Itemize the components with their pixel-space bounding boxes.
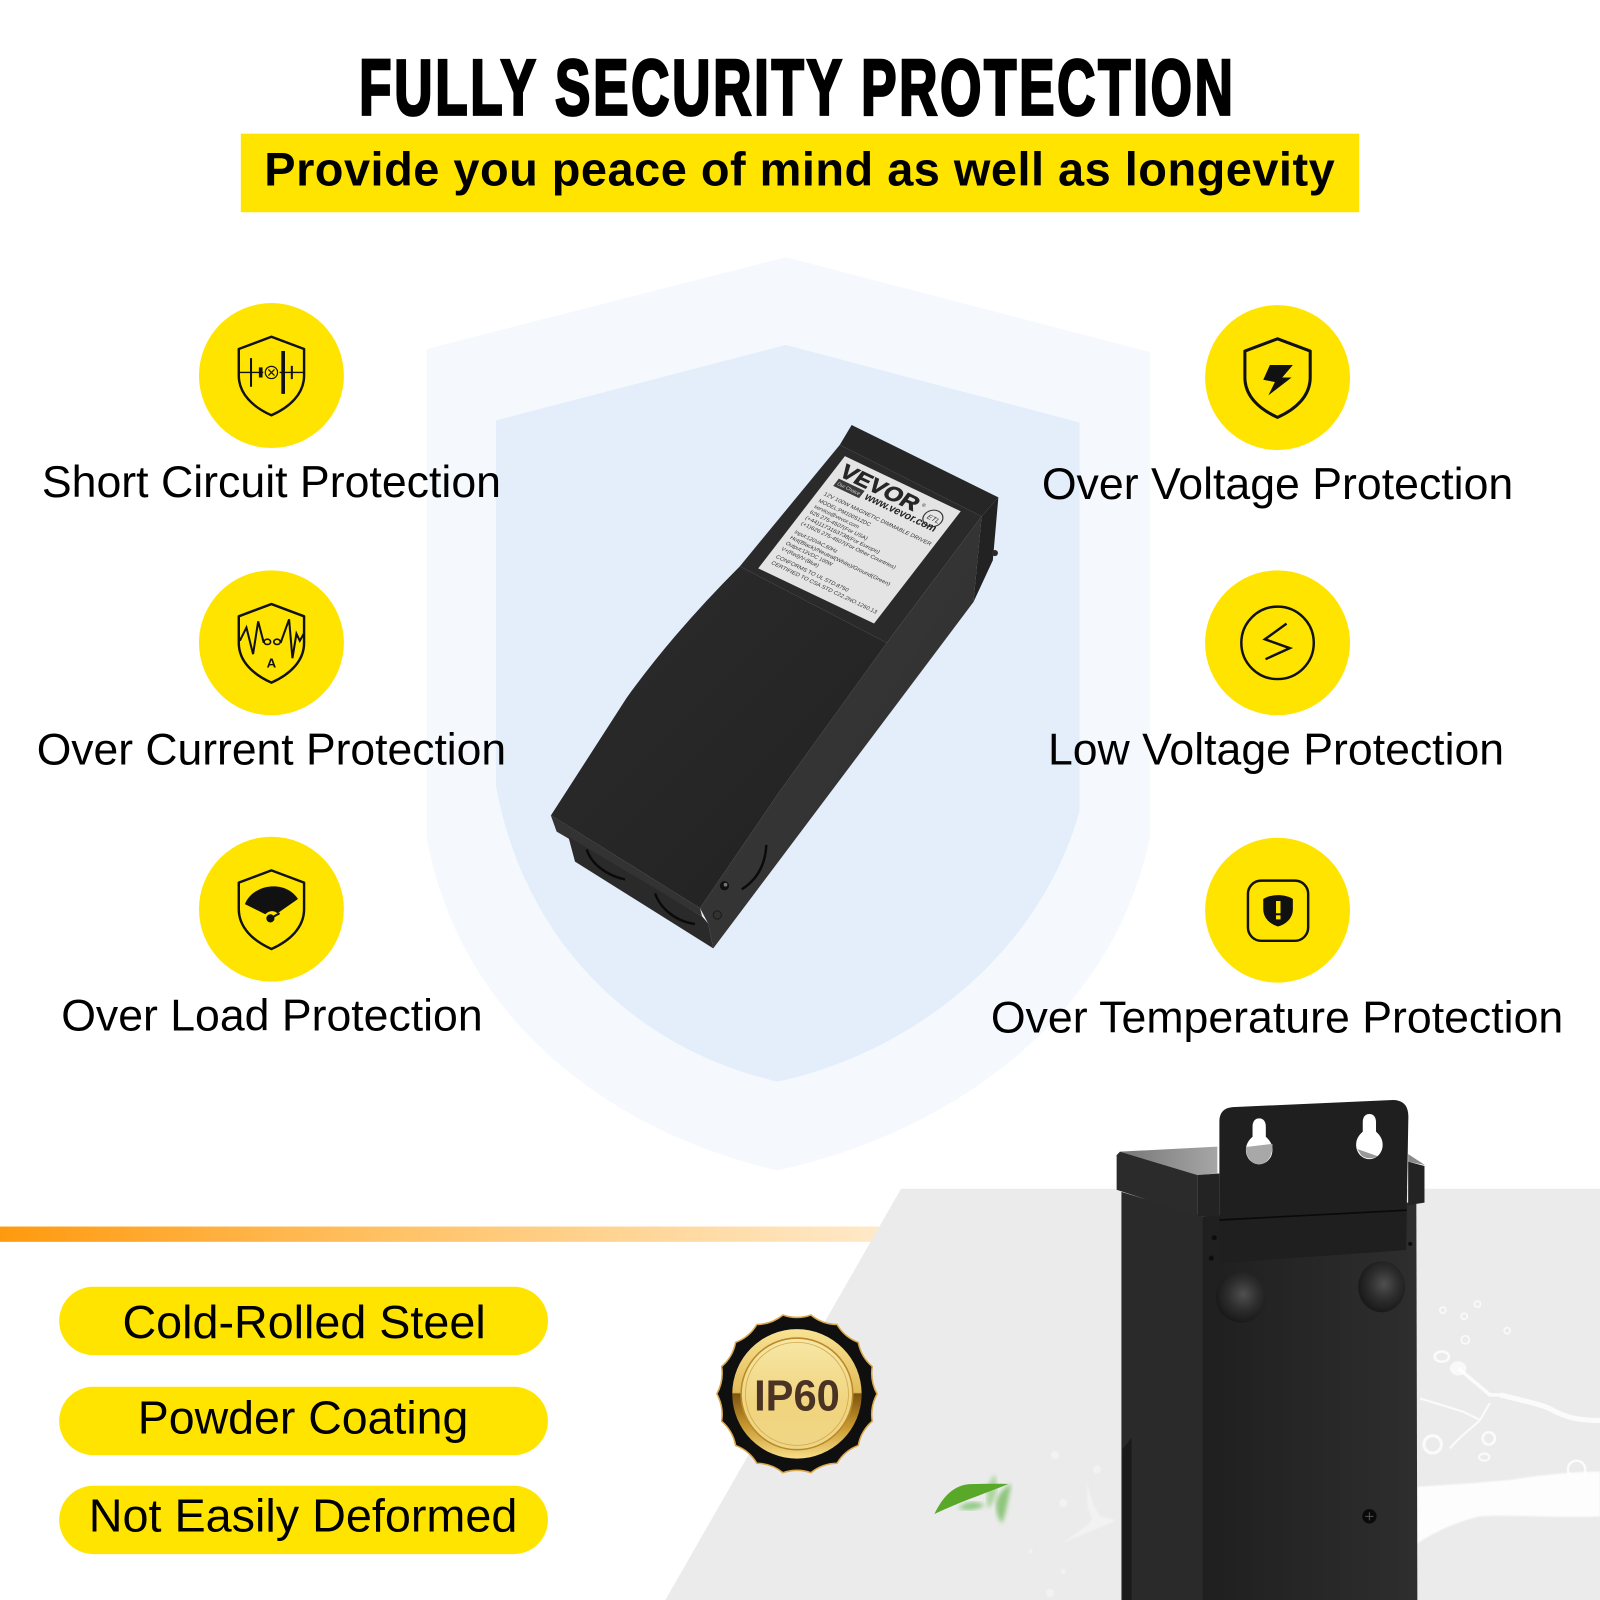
pill: not easily deformed: [59, 1486, 548, 1554]
title: FULLY SECURITY PROTECTION: [359, 44, 1236, 132]
product label: Our Choice: [835, 482, 861, 497]
rear cap left: [1117, 1152, 1197, 1216]
icon: over load shield: [199, 837, 344, 982]
product label: Input:120VAC,60Hz: [793, 530, 839, 555]
pill: cold-rolled steel: Cold-Rolled Steel: [122, 1296, 486, 1348]
water splash: [1029, 1301, 1600, 1597]
label: short circuit: Short Circuit Protection: [42, 456, 501, 507]
rear main face: [1202, 1202, 1417, 1600]
product label: MODEL:PM100S12DC: [817, 499, 872, 528]
keyhole left: [1246, 1118, 1272, 1164]
product label: V+(Red)/V-(Blue): [780, 547, 820, 569]
icon: short circuit shield: [199, 303, 344, 448]
orange divider: [0, 1227, 880, 1242]
background shield: outer: [427, 257, 1150, 1170]
rubber feet: [1216, 1261, 1405, 1322]
product: driver box: [551, 425, 998, 948]
rear screw: [1362, 1509, 1377, 1523]
mounting plate: [1219, 1100, 1408, 1263]
rear top of box: [1120, 1147, 1217, 1175]
box cap top lip: [840, 425, 998, 516]
grey panel: [665, 1189, 1600, 1600]
label: low voltage: Low Voltage Protection: [1048, 723, 1504, 774]
product label: ETL: [925, 513, 942, 525]
product label: CERTIFIED TO CSA STD C22.2NO.1250.13: [769, 561, 878, 615]
front knockouts: [587, 845, 766, 924]
label: over current: Over Current Protection: [37, 723, 506, 774]
label: over voltage: Over Voltage Protection: [1042, 458, 1513, 509]
product: rear view of box: [1117, 1100, 1425, 1600]
product label: 626 275-4507(For USA): [808, 510, 869, 542]
pill: powder coating: Powder Coating: [138, 1392, 468, 1444]
product label: VEVOR: [835, 460, 925, 515]
product label: Hot(Black)/Neutral(White)/Ground(Green): [788, 535, 892, 588]
pill: powder coating: [59, 1387, 548, 1455]
product label: www.vevor.com: [861, 491, 939, 534]
label: over temperature: Over Temperature Protection: [991, 992, 1563, 1043]
subtitle banner: [241, 134, 1359, 212]
product label: CONFORMS TO UL STD.8750: [774, 555, 850, 593]
product label: Output:12VDC 100W: [784, 541, 834, 568]
product label: [758, 456, 961, 623]
product label: service@vevor.com: [812, 504, 861, 530]
product label: ®: [920, 502, 928, 509]
rear lower strip: [1122, 1438, 1132, 1600]
pill: not easily deformed: Not Easily Deformed: [89, 1490, 517, 1542]
box label face: [740, 445, 982, 643]
keyhole right: [1356, 1114, 1383, 1159]
icon: over temperature: [1205, 838, 1350, 983]
icon: over current shield: [199, 570, 344, 715]
box front face: [568, 837, 713, 948]
box end cap side: [973, 497, 998, 602]
label: over load: Over Load Protection: [61, 990, 483, 1041]
subtitle banner: Provide you peace of mind as well as longevity: [264, 144, 1335, 196]
pill: cold-rolled steel: [59, 1287, 548, 1355]
product label: (+44)1173163738(For Europe): [804, 516, 881, 555]
icon: low voltage: [1205, 570, 1350, 715]
rear left side: [1121, 1192, 1202, 1600]
box right side: [700, 516, 982, 948]
product label: 12V 100W MAGNETIC DIMMABLE DRIVER: [822, 492, 932, 547]
product label: (+1)626 275-4507(For Other Countries): [799, 521, 897, 571]
rear cap right: [1408, 1162, 1424, 1205]
rear cap front: [1197, 1173, 1219, 1216]
mounting plate screws: [1209, 1235, 1412, 1261]
IP60 badge: IP60: [754, 1372, 840, 1421]
IP60 badge: [717, 1315, 877, 1473]
box lid lip: [551, 815, 702, 916]
icon: over current shield: A: [267, 655, 277, 670]
icon: over voltage shield: [1205, 305, 1350, 450]
leaf: [934, 1474, 1011, 1523]
box screws: [713, 550, 998, 919]
background shield: inner: [496, 345, 1080, 1082]
box lid: [551, 566, 887, 908]
